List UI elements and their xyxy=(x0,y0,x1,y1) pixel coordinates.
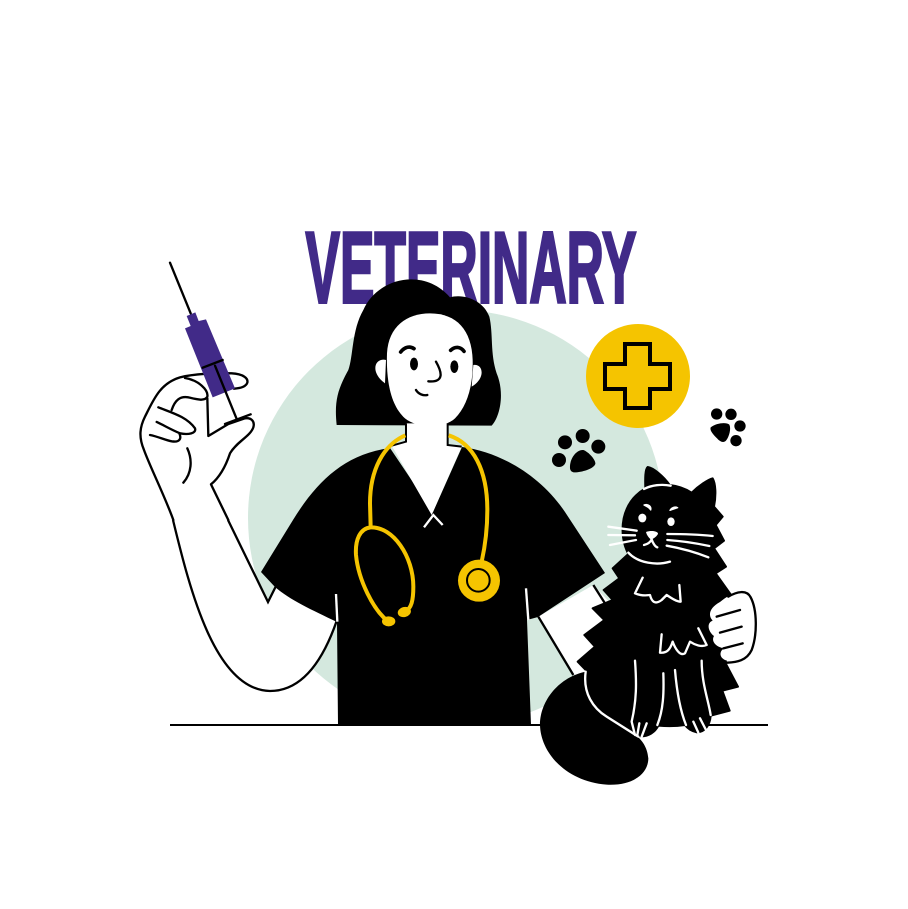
nose and smile xyxy=(416,362,441,395)
stethoscope xyxy=(356,435,500,626)
doctor xyxy=(173,279,620,725)
fingers xyxy=(150,378,207,483)
face xyxy=(387,313,473,426)
neck xyxy=(392,423,462,515)
arm and hand holding syringe xyxy=(140,263,254,520)
cat tail xyxy=(540,672,648,785)
paw print right xyxy=(710,408,746,446)
scrubs xyxy=(261,447,605,725)
cat fur and legs xyxy=(632,578,711,737)
background circle xyxy=(248,310,664,726)
paw print left xyxy=(552,429,605,472)
hair xyxy=(336,279,501,426)
scrub details xyxy=(336,515,528,622)
eyebrows xyxy=(401,347,464,352)
chest piece xyxy=(458,560,500,602)
medical cross badge xyxy=(586,324,690,428)
cat silhouette xyxy=(578,467,738,736)
syringe xyxy=(170,263,251,424)
left arm outline xyxy=(173,520,337,691)
cat hand xyxy=(709,592,756,663)
eyes xyxy=(410,358,418,370)
tail and body outline xyxy=(585,672,638,737)
cat face xyxy=(608,485,713,564)
paw prints xyxy=(552,408,746,472)
arm fill and outline xyxy=(173,484,337,691)
earpieces xyxy=(382,616,395,626)
floor line xyxy=(170,724,768,726)
cross xyxy=(605,344,670,408)
right arm xyxy=(538,585,620,677)
hand xyxy=(140,373,254,520)
ears xyxy=(375,360,482,387)
cat xyxy=(540,467,756,785)
head and hair xyxy=(336,279,501,515)
